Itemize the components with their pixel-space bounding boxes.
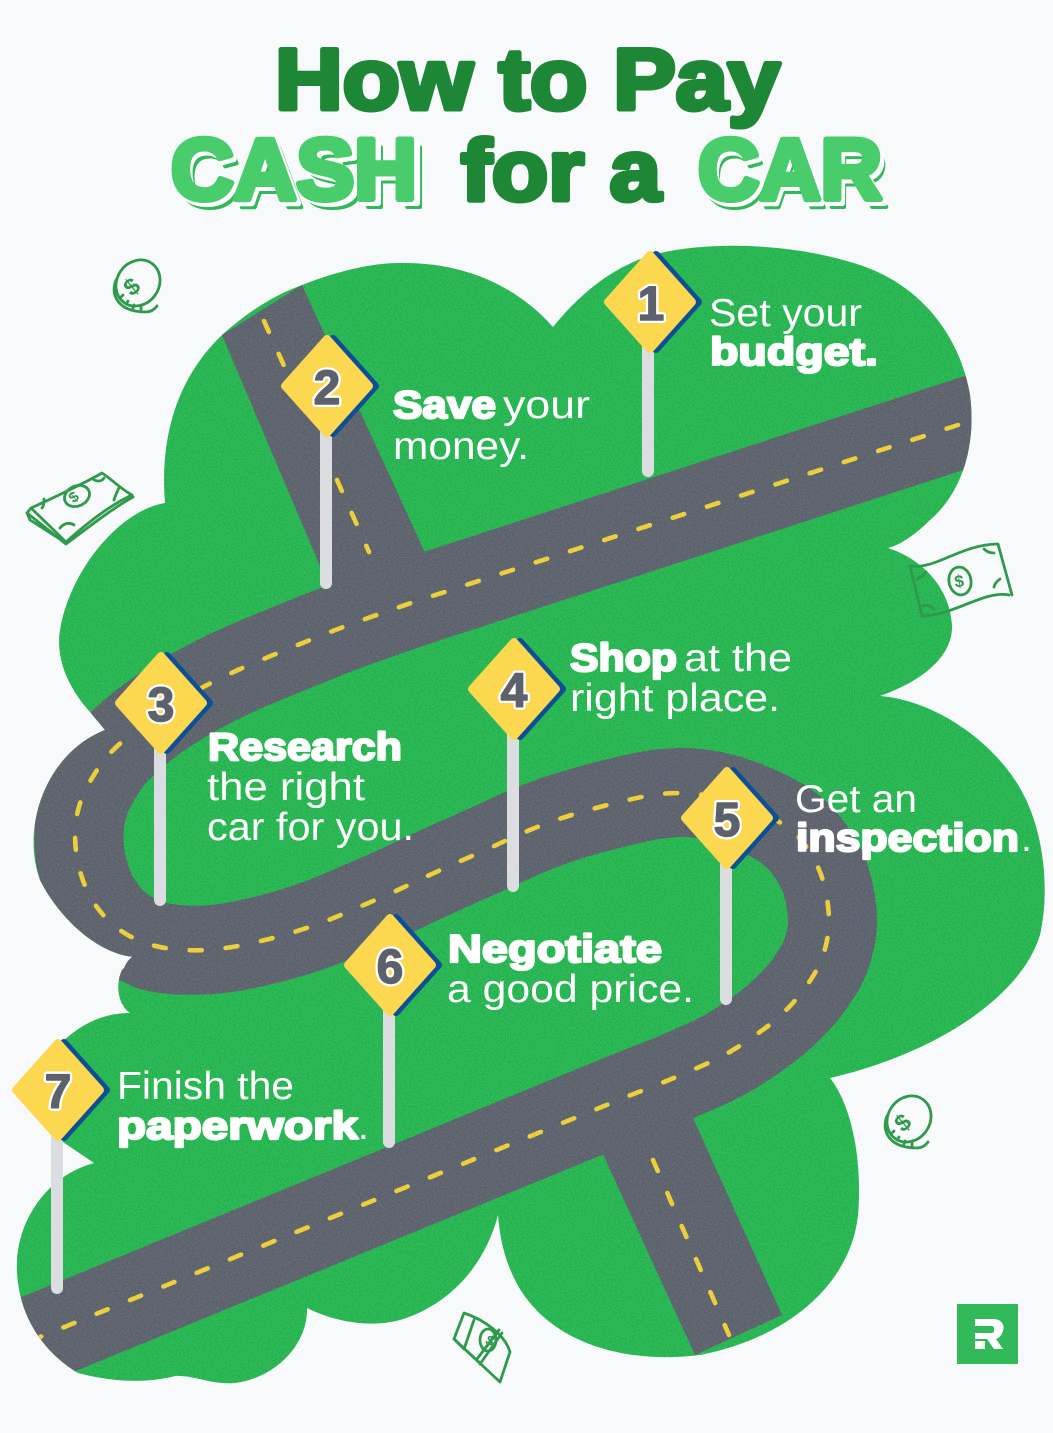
step 5 text: Get an bbox=[795, 778, 917, 821]
step 7 text bbox=[117, 1065, 369, 1148]
sign 7 bbox=[16, 1043, 106, 1294]
title word: CASH: CASH bbox=[173, 126, 423, 222]
step 6 text: a good price. bbox=[447, 968, 694, 1011]
step 1 text bbox=[709, 292, 878, 374]
sign 3 bbox=[119, 656, 209, 906]
road: center dashes, main road bbox=[40, 425, 958, 1337]
sign 1: 1 bbox=[638, 278, 664, 331]
icon: bill right bbox=[910, 544, 1012, 616]
road: lower bulge of return lane bbox=[122, 955, 220, 995]
icon: wrapped cash bottom: $ bbox=[483, 1332, 497, 1349]
icon: coin bottom right bbox=[878, 1087, 940, 1151]
step 2 text: money. bbox=[393, 425, 529, 468]
sign 6: 6 bbox=[377, 941, 403, 994]
step 7 text: . bbox=[358, 1105, 369, 1148]
sign 2: 2 bbox=[314, 362, 340, 415]
step 4 text: right place. bbox=[570, 677, 780, 720]
step 1 text: budget. bbox=[710, 331, 878, 374]
step 4 text: at the bbox=[684, 637, 792, 680]
step 3 text: the right bbox=[207, 766, 365, 809]
step 6 text bbox=[447, 928, 694, 1011]
step 5 text: . bbox=[1021, 817, 1032, 860]
step 3 text: car for you. bbox=[207, 806, 414, 849]
step 2 text: Save bbox=[393, 384, 496, 427]
step 3 text: Research bbox=[208, 726, 402, 769]
step 2 text: your bbox=[503, 384, 590, 427]
sign 1: 1 bbox=[638, 278, 664, 331]
step 6 text: Negotiate bbox=[448, 928, 662, 971]
title word: CASH: CASH bbox=[176, 130, 426, 226]
title word: CASH: CASH bbox=[171, 122, 417, 218]
panel: green map background bbox=[17, 246, 1045, 1383]
sign 6 bbox=[348, 918, 438, 1148]
sign 2: 2 bbox=[314, 362, 340, 415]
road: main winding road bbox=[0, 408, 1010, 1354]
icon: wrapped cash bottom bbox=[454, 1313, 510, 1382]
sign 4: 4 bbox=[501, 665, 528, 718]
title line: How to Pay: How to Pay bbox=[275, 32, 780, 128]
icon: stacked bills left bbox=[27, 473, 133, 544]
road network bbox=[0, 285, 1010, 1355]
sign 3: 3 bbox=[148, 679, 174, 732]
sign 6: 6 bbox=[377, 941, 403, 994]
title word: CAR: CAR bbox=[698, 122, 882, 218]
icon: coin top left: $ bbox=[118, 272, 146, 302]
step 1 text: Set your bbox=[709, 292, 862, 335]
sign 1 bbox=[608, 255, 698, 477]
title words: for a: for a bbox=[461, 123, 662, 219]
road: center dashes, top branch bbox=[264, 321, 369, 552]
sign 5 bbox=[685, 771, 775, 1005]
sign 7: 7 bbox=[45, 1066, 71, 1119]
title bbox=[171, 32, 888, 226]
sign 3: 3 bbox=[148, 679, 174, 732]
sign 4: 4 bbox=[501, 665, 528, 718]
logo: Ramsey R bbox=[957, 1304, 1018, 1364]
icon: stacked bills left: $ bbox=[65, 488, 83, 507]
icon: coin bottom right: $ bbox=[889, 1108, 917, 1138]
sign 7: 7 bbox=[45, 1066, 71, 1119]
sign 2 bbox=[285, 339, 375, 589]
road: top branch bbox=[222, 285, 445, 625]
step 4 text bbox=[570, 637, 792, 720]
step 7 text: paperwork bbox=[117, 1105, 358, 1148]
step 5 text bbox=[795, 778, 1032, 860]
icon: coin top left bbox=[107, 251, 169, 315]
icon: bill right: $ bbox=[953, 571, 966, 592]
step 2 text bbox=[393, 384, 590, 468]
sign 4 bbox=[472, 642, 562, 892]
road: bottom branch bbox=[585, 1078, 782, 1355]
step 3 text bbox=[207, 726, 414, 849]
step 7 text: Finish the bbox=[117, 1065, 294, 1108]
step 5 text: inspection bbox=[796, 817, 1019, 860]
sign 5: 5 bbox=[714, 794, 740, 847]
title word: CAR: CAR bbox=[700, 126, 886, 222]
road: center dashes, bottom branch bbox=[653, 1160, 729, 1335]
sign 5: 5 bbox=[714, 794, 740, 847]
step 4 text: Shop bbox=[570, 637, 677, 680]
title word: CAR: CAR bbox=[702, 130, 888, 226]
